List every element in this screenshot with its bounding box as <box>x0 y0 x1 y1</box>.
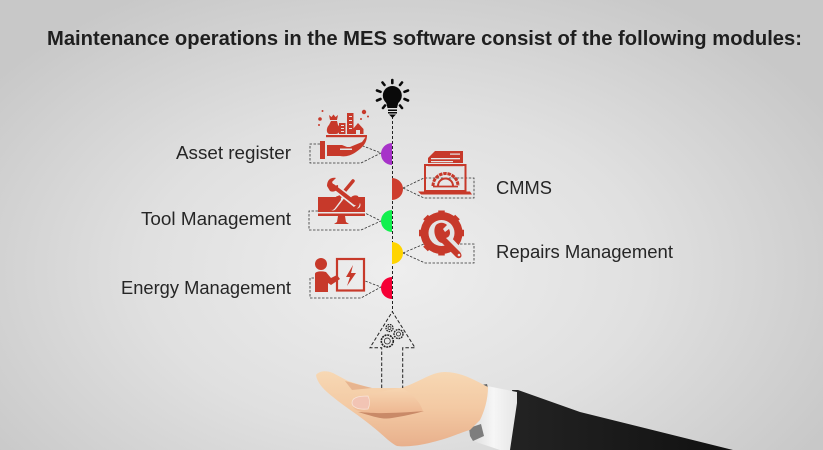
connector <box>310 144 381 163</box>
palm and fingers <box>316 371 488 446</box>
module: Asset register <box>176 110 392 165</box>
suit sleeve <box>508 390 733 450</box>
half-circle marker <box>381 277 392 299</box>
label: Asset register <box>176 143 291 163</box>
label: Repairs Management <box>496 242 673 262</box>
connector <box>309 211 381 230</box>
icon: laptop with window <box>418 151 472 194</box>
label: Energy Management <box>121 278 291 298</box>
icon: light bulb <box>377 80 408 118</box>
module: Energy Management <box>121 258 392 299</box>
half-circle marker <box>381 143 392 165</box>
module: Repairs Management <box>392 210 673 264</box>
connector <box>403 244 474 263</box>
connector <box>403 178 474 198</box>
label: Tool Management <box>141 209 291 229</box>
thumb <box>352 388 423 413</box>
icon: monitor with tools <box>318 178 365 224</box>
hand holding the diagram <box>316 371 733 450</box>
icon: hand with assets <box>318 110 369 159</box>
title: Maintenance operations in the MES software consist of the following modules: <box>47 27 802 50</box>
module: Tool Management <box>141 178 392 232</box>
label: CMMS <box>496 178 552 198</box>
dashed arrow <box>370 312 415 388</box>
thumb nail <box>352 396 370 409</box>
half-circle marker <box>392 242 403 264</box>
icon: gears <box>381 324 403 347</box>
connector <box>310 278 381 298</box>
shirt cuff <box>470 386 517 450</box>
icon: person with energy board <box>315 258 364 292</box>
vertical dashed stem <box>392 116 394 312</box>
module: CMMS <box>392 151 552 200</box>
half-circle marker <box>381 210 392 232</box>
icon: gear with wrench <box>419 210 464 258</box>
half-circle marker <box>392 178 403 200</box>
